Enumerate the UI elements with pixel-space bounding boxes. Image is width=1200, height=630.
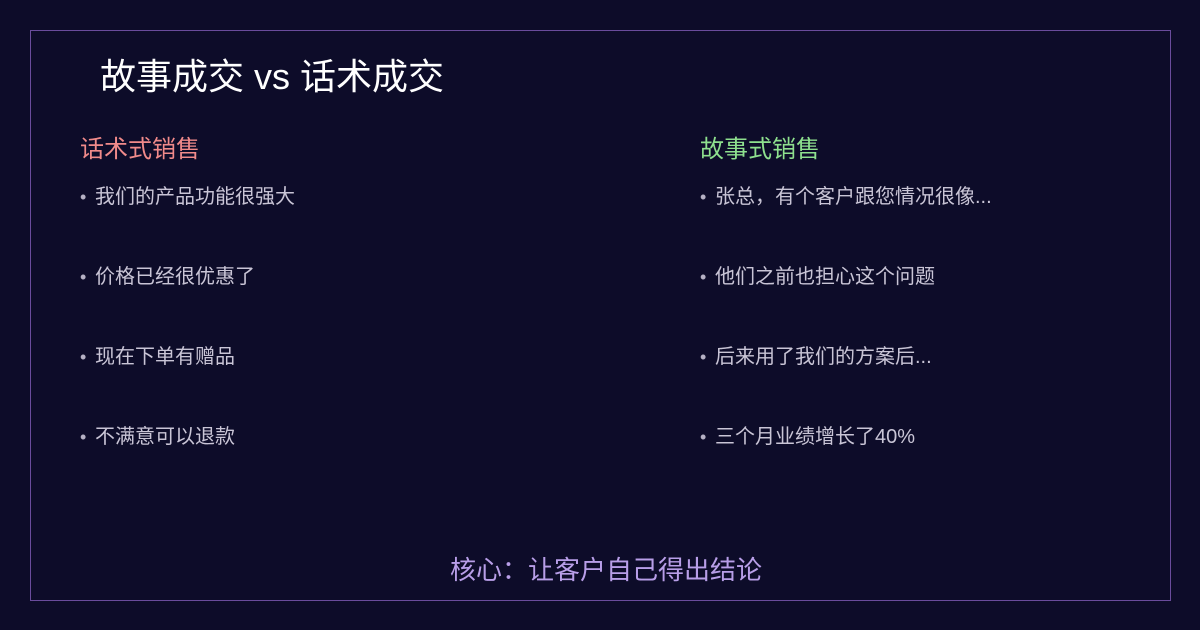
title: 故事成交 vs 话术成交: [100, 56, 444, 97]
list items: [80, 186, 295, 448]
callout: core: 核心：让客户自己得出结论: [450, 555, 762, 585]
list items: [700, 186, 992, 448]
list items: 张总，有个客户跟您情况很像...: [715, 186, 992, 208]
list items: 现在下单有赠品: [95, 346, 235, 368]
list items: 价格已经很优惠了: [95, 266, 255, 288]
panel: story sales: [700, 136, 992, 448]
panel: scripted sales: [80, 136, 295, 448]
heading: scripted: 话术式销售: [80, 136, 200, 163]
list items: 他们之前也担心这个问题: [715, 266, 935, 288]
list items: 我们的产品功能很强大: [95, 186, 295, 208]
list items: 三个月业绩增长了40%: [715, 426, 915, 448]
heading: story: 故事式销售: [700, 136, 820, 163]
list items: 不满意可以退款: [95, 426, 235, 448]
list items: 后来用了我们的方案后...: [715, 346, 932, 368]
